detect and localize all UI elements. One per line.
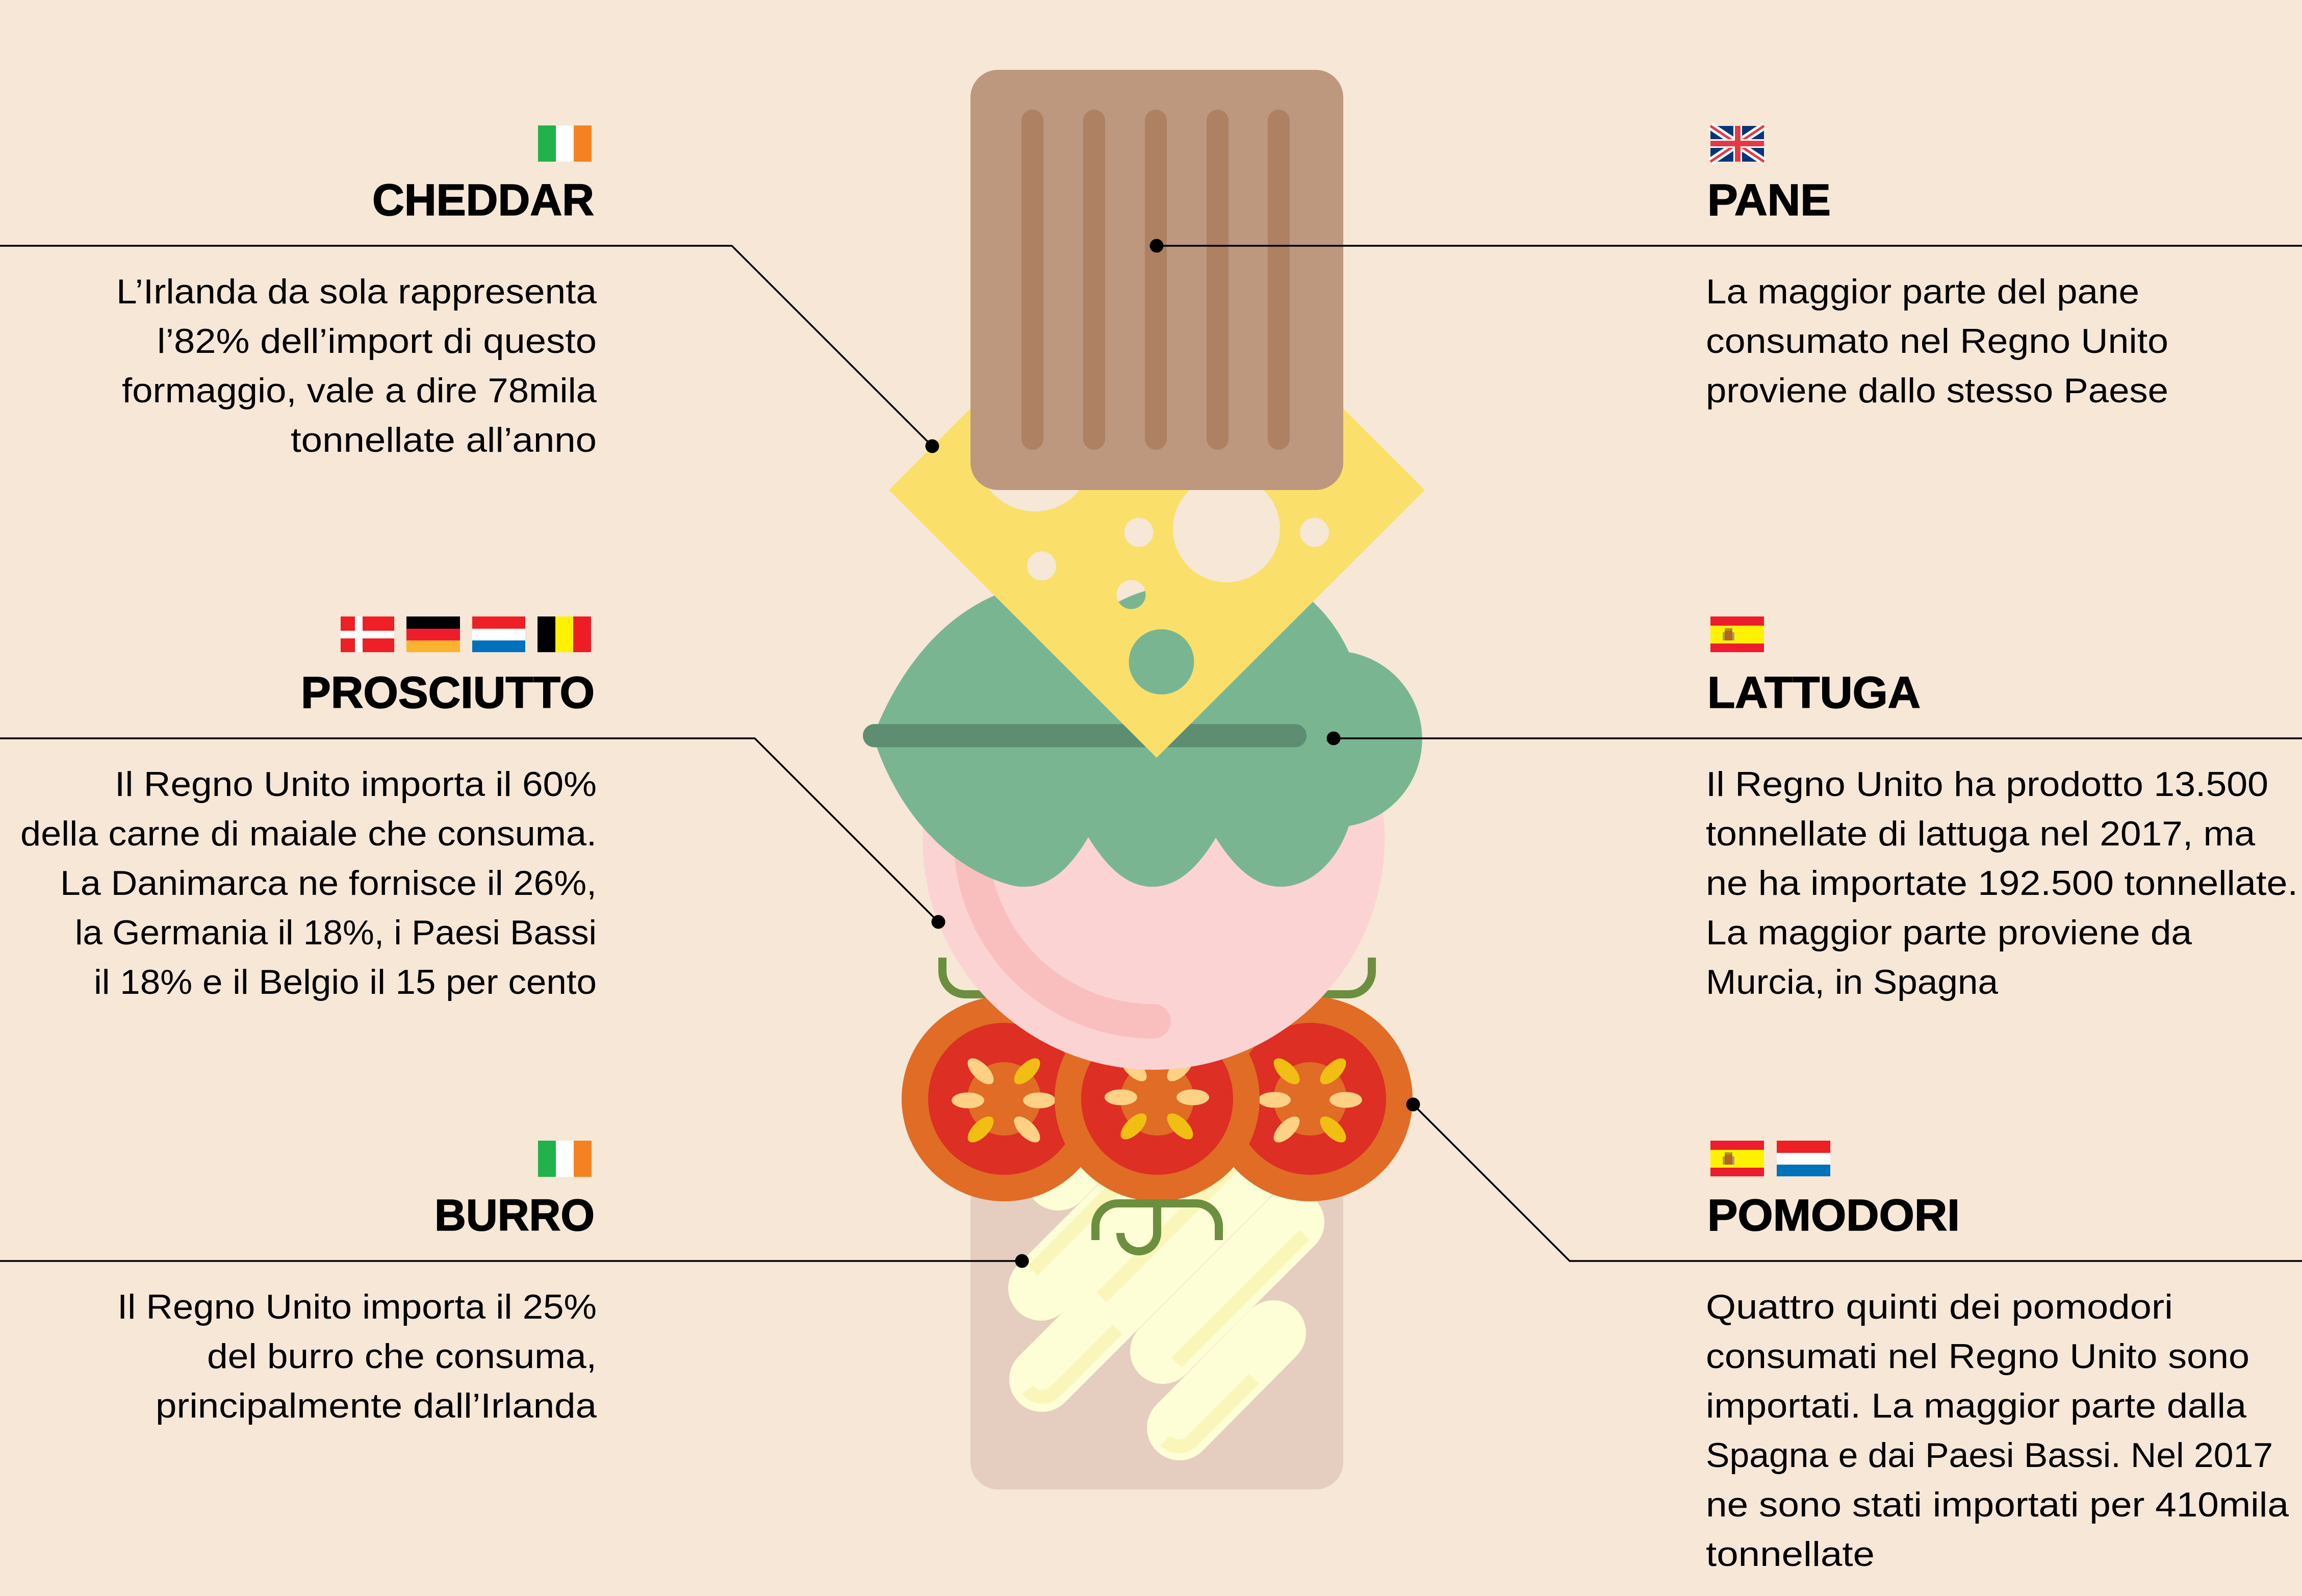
tomato: middle bbox=[1055, 996, 1260, 1201]
text: lattuga bbox=[1706, 765, 2298, 1001]
panel: pane bbox=[1706, 126, 2168, 410]
text: cheddar bbox=[116, 272, 597, 459]
lettuce leaf bbox=[863, 583, 1422, 887]
text: burro: principalmente dall’Irlanda bbox=[156, 1386, 597, 1425]
text: pomodori: Quattro quinti dei pomodori bbox=[1706, 1288, 2173, 1326]
heading: burro: BURRO bbox=[434, 1191, 595, 1240]
flags: Spain, Netherlands bbox=[1710, 1141, 1830, 1176]
butter bbox=[1028, 1089, 1305, 1447]
text: pane: consumato nel Regno Unito bbox=[1706, 322, 2168, 361]
panel: pomodori bbox=[1706, 1141, 2289, 1574]
text: pomodori: Spagna e dai Paesi Bassi. Nel 2017 bbox=[1706, 1436, 2273, 1475]
leader line: burro bbox=[0, 1254, 1029, 1268]
flag: Spain bbox=[1710, 616, 1764, 652]
text: pane bbox=[1706, 272, 2168, 410]
text: burro bbox=[117, 1288, 597, 1425]
text: cheddar: formaggio, vale a dire 78mila bbox=[122, 371, 597, 410]
text: prosciutto: della carne di maiale che consuma. bbox=[20, 814, 597, 853]
text: cheddar: tonnellate all’anno bbox=[291, 421, 597, 459]
text: pane: La maggior parte del pane bbox=[1706, 272, 2139, 311]
illustration: sandwich layers bbox=[863, 70, 1425, 1489]
text: prosciutto: la Germania il 18%, i Paesi Bassi bbox=[75, 913, 597, 952]
bottom bread slice bbox=[970, 1173, 1343, 1489]
flags: Denmark, Germany, Netherlands, Belgium bbox=[341, 616, 591, 652]
cheese slice bbox=[889, 222, 1425, 758]
text: prosciutto: La Danimarca ne fornisce il 26%, bbox=[60, 864, 597, 903]
flag: United Kingdom bbox=[1710, 126, 1764, 162]
upper tomato stems bbox=[942, 958, 1372, 994]
flag: Ireland bbox=[538, 1141, 592, 1177]
tomato: right bbox=[1208, 996, 1413, 1201]
heading: pane: PANE bbox=[1707, 175, 1831, 225]
text: lattuga: tonnellate di lattuga nel 2017, ma bbox=[1706, 814, 2255, 853]
lower tomato stem bbox=[1095, 1203, 1219, 1251]
ham slice bbox=[923, 608, 1385, 1070]
text: lattuga: Il Regno Unito ha prodotto 13.500 bbox=[1706, 765, 2268, 804]
text: pane: proviene dallo stesso Paese bbox=[1706, 371, 2168, 410]
text: pomodori: tonnellate bbox=[1706, 1535, 1875, 1574]
text: pomodori: ne sono stati importati per 410mila bbox=[1706, 1485, 2289, 1524]
panel: burro bbox=[117, 1141, 597, 1425]
text: burro: Il Regno Unito importa il 25% bbox=[117, 1288, 597, 1326]
heading: lattuga: LATTUGA bbox=[1707, 668, 1921, 717]
tomato: left bbox=[902, 996, 1107, 1201]
text: prosciutto: Il Regno Unito importa il 60% bbox=[115, 765, 597, 804]
text: lattuga: ne ha importate 192.500 tonnellate. bbox=[1706, 864, 2298, 903]
leader line: pomodori bbox=[1406, 1097, 2302, 1261]
text: prosciutto: il 18% e il Belgio il 15 per cento bbox=[94, 963, 597, 1001]
leader line: cheddar bbox=[0, 246, 939, 453]
text: prosciutto bbox=[20, 765, 597, 1001]
text: lattuga: Murcia, in Spagna bbox=[1706, 963, 1998, 1001]
text: burro: del burro che consuma, bbox=[207, 1337, 597, 1376]
heading: pomodori: POMODORI bbox=[1707, 1191, 1960, 1240]
panel: prosciutto bbox=[20, 616, 597, 1001]
text: cheddar: l’82% dell’import di questo bbox=[157, 322, 597, 361]
leader line: prosciutto bbox=[0, 738, 945, 929]
text: cheddar: L’Irlanda da sola rappresenta bbox=[116, 272, 597, 311]
panel: lattuga bbox=[1706, 616, 2298, 1001]
top bread slice bbox=[970, 70, 1343, 490]
heading: prosciutto: PROSCIUTTO bbox=[301, 668, 595, 717]
text: pomodori: importati. La maggior parte dalla bbox=[1706, 1386, 2246, 1425]
panel: cheddar bbox=[116, 125, 597, 459]
text: lattuga: La maggior parte proviene da bbox=[1706, 913, 2192, 952]
flag: Ireland bbox=[538, 125, 592, 162]
leader line: pane bbox=[1149, 239, 2302, 253]
text: pomodori bbox=[1706, 1288, 2289, 1574]
leader line: lattuga bbox=[1327, 731, 2302, 745]
heading: cheddar: CHEDDAR bbox=[372, 175, 594, 225]
text: pomodori: consumati nel Regno Unito sono bbox=[1706, 1337, 2249, 1376]
